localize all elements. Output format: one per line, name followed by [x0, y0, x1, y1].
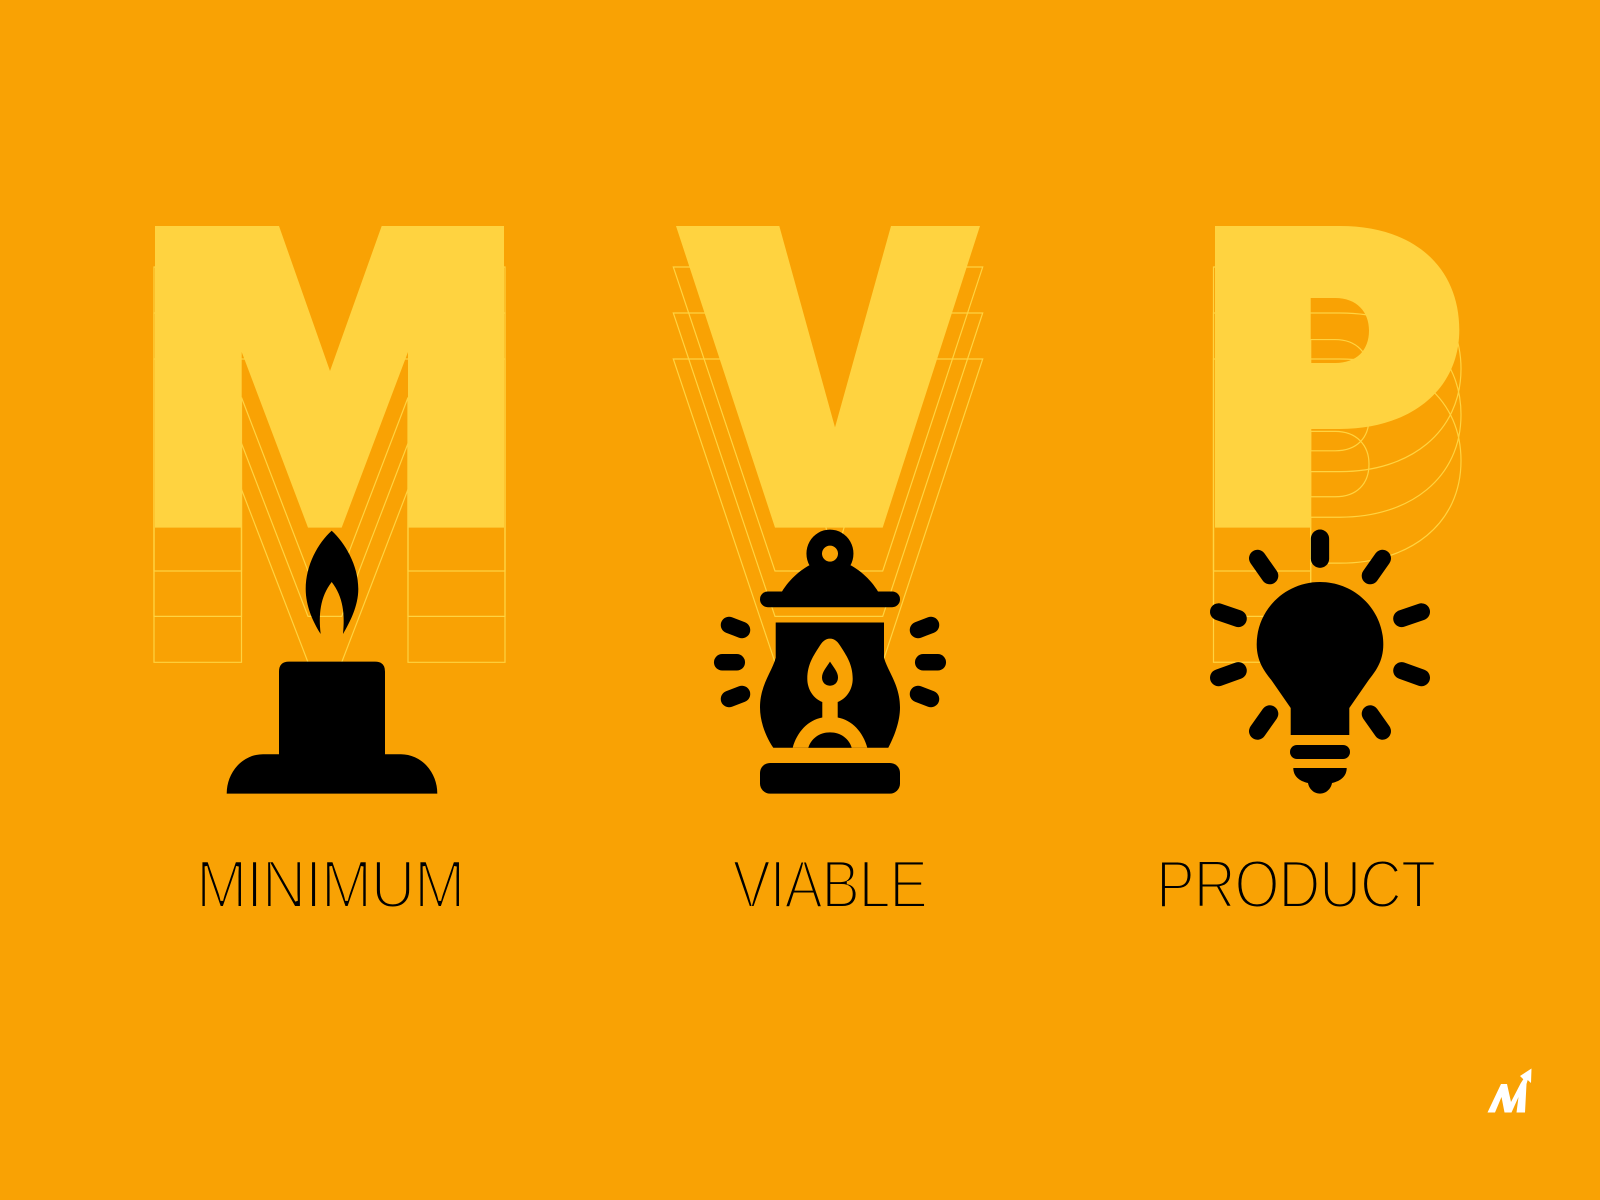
icon: light bulb [1218, 539, 1422, 794]
label: MINIMUM: MINIMUM [196, 846, 464, 922]
lantern light rays [722, 625, 938, 699]
label: VIABLE: VIABLE [732, 846, 926, 922]
M solid letter [155, 226, 504, 528]
bulb glass [1257, 582, 1383, 735]
lantern flame drop [822, 662, 838, 686]
letter V with echo outlines [673, 226, 983, 662]
letter P with echo outlines [1214, 226, 1461, 662]
P solid letter [1215, 226, 1459, 528]
bulb tip [1293, 768, 1347, 794]
candle body and base [227, 662, 437, 794]
lantern ring [806, 530, 853, 578]
logo mark [1488, 1068, 1532, 1112]
P echo outlines [1214, 267, 1461, 662]
bulb screw bar [1290, 745, 1350, 759]
letter M with echo outlines [154, 226, 505, 662]
icon: candle [227, 531, 437, 794]
M echo outlines [154, 267, 505, 662]
V echo outlines [673, 267, 983, 662]
V solid letter [676, 226, 980, 528]
lantern glass body [760, 622, 900, 748]
lantern dome [782, 564, 878, 592]
lantern cap bar [760, 592, 900, 607]
candle flame [306, 531, 358, 634]
lantern ring hole [822, 546, 838, 562]
bulb light rays [1218, 539, 1422, 731]
lantern wick cut-out [793, 639, 867, 748]
label: PRODUCT: PRODUCT [1156, 846, 1435, 922]
icon: lantern [722, 530, 938, 794]
lantern burner [808, 732, 852, 748]
lantern base [760, 763, 900, 794]
